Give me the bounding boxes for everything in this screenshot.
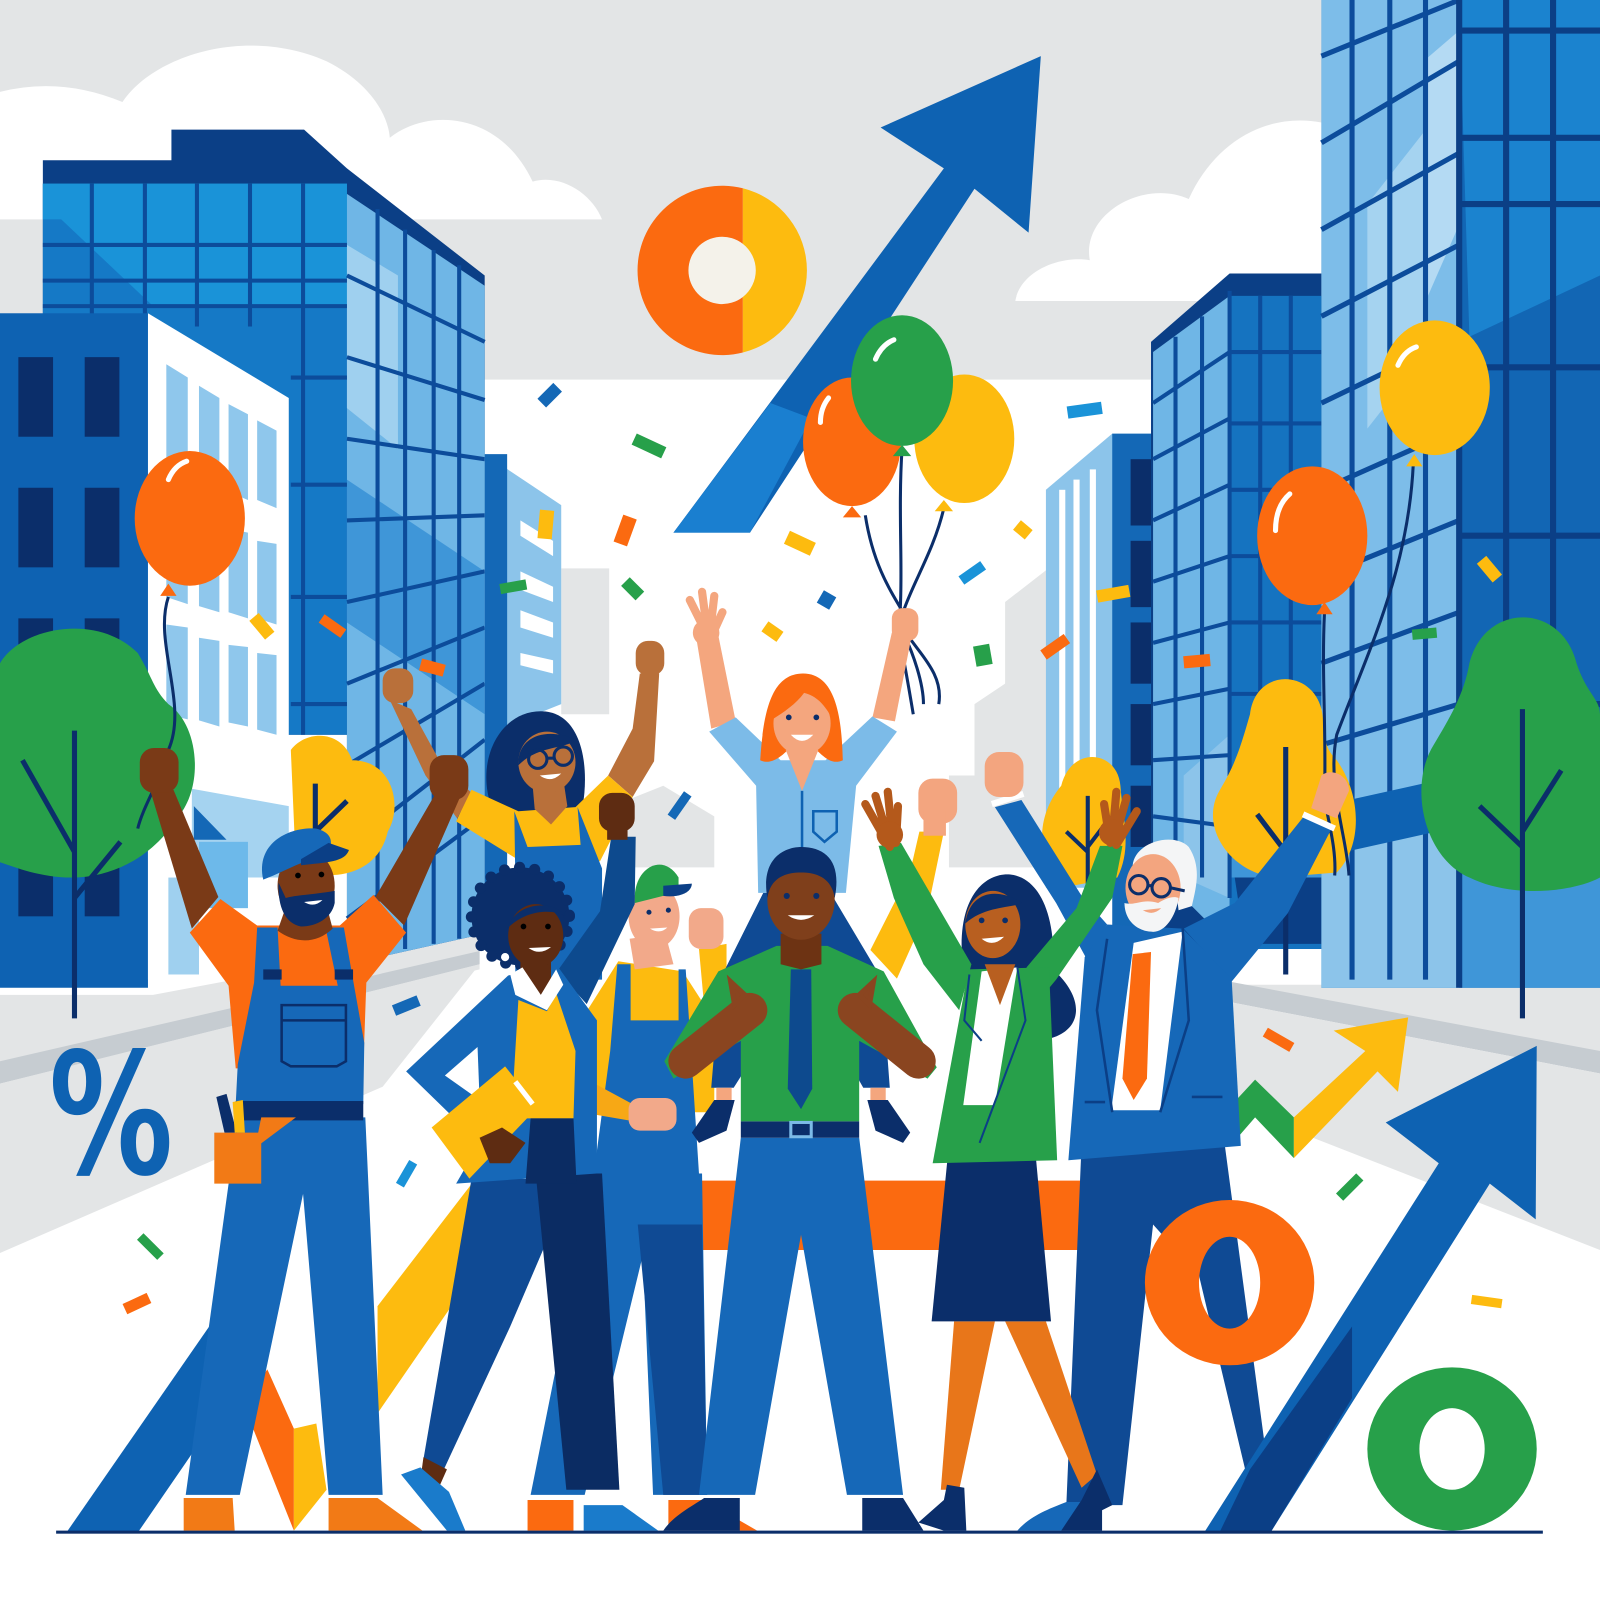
cloud right (1015, 121, 1321, 301)
balloons right (1257, 320, 1490, 876)
yellow ribbon (378, 1173, 480, 1413)
distant grey buildings (561, 566, 1051, 867)
right glass tower (1151, 273, 1321, 949)
person: woman with glasses and yellow top (383, 641, 664, 980)
balloon left (135, 451, 245, 829)
far right tower (1321, 0, 1600, 988)
small green and yellow growth arrow (1230, 1017, 1408, 1158)
person: woman in blue blazer with folder (401, 793, 658, 1531)
right small building (1046, 434, 1153, 944)
blue triangle bottom left (66, 1327, 209, 1533)
balloon strings centre (865, 449, 944, 714)
ground line (56, 1531, 1543, 1534)
ground and road (0, 934, 1600, 1253)
balloons centre (803, 315, 1014, 517)
person: older man in blue suit (985, 752, 1349, 1531)
cloud left (0, 46, 602, 219)
tree: green right (1421, 617, 1600, 1018)
small building left of street (485, 454, 561, 939)
orange ribbon (628, 1181, 1082, 1250)
tree: yellow left (291, 736, 395, 875)
orange ring (1145, 1200, 1314, 1365)
tree: green left (0, 629, 195, 1018)
white building (148, 313, 289, 980)
percent sign: % (49, 1016, 173, 1213)
person: man in green shirt carrying girl (663, 847, 937, 1531)
person: woman in green blazer (865, 792, 1137, 1531)
green ring (1367, 1367, 1537, 1531)
big growth arrow bottom right (1204, 1046, 1537, 1533)
confetti (123, 383, 1502, 1314)
tree: yellow right small (1042, 757, 1126, 888)
person: raised arm in yellow sleeve (870, 779, 957, 979)
left glass tower (43, 130, 485, 964)
person: man with green cap (528, 865, 757, 1531)
person: girl on shoulders with balloons (690, 592, 918, 1143)
sky (0, 0, 1600, 380)
person: worker with blue overalls and tool belt (140, 748, 468, 1531)
chevron arrow bottom left (243, 1369, 327, 1531)
big growth arrow top (673, 56, 1041, 533)
left blue building (0, 313, 148, 988)
tree: yellow right (1213, 679, 1356, 974)
donut chart top (638, 186, 807, 355)
